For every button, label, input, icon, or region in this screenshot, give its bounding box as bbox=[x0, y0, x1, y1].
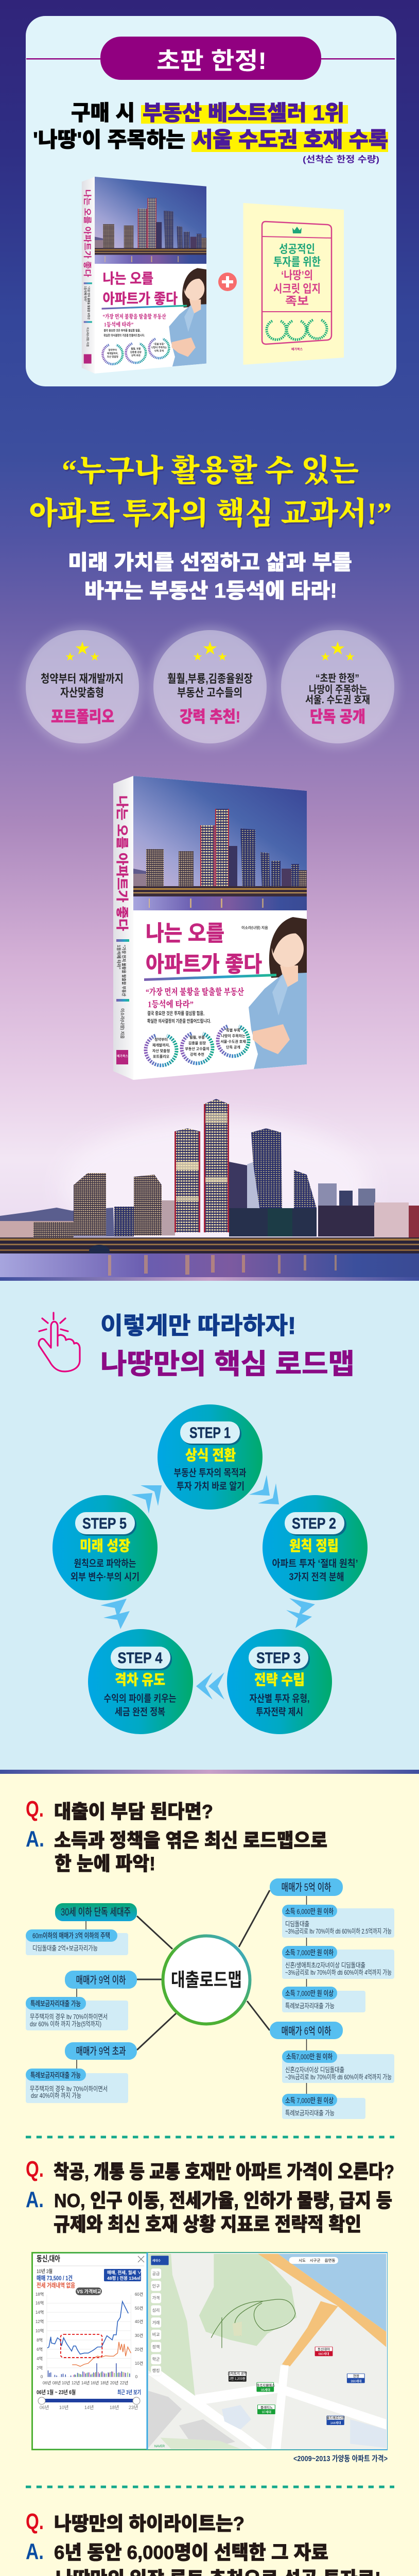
large book cover: 김종율 원장 bbox=[188, 1041, 206, 1045]
bonus booklet: 투자를 위한 bbox=[273, 256, 321, 268]
line chart: apartment price: 0 bbox=[135, 2375, 138, 2379]
map: neighborhood: 시구군 bbox=[310, 2258, 320, 2263]
node: up to 600M: 소득 7,000만 원 이상 bbox=[285, 2096, 334, 2105]
node: up to 500M: 특례보금자리대출 가능 bbox=[285, 2002, 335, 2010]
headline: core textbook: “누구나 활용할 수 있는 bbox=[63, 455, 360, 489]
large book cover: 훨훨, 부룡 bbox=[189, 1035, 205, 1040]
line chart: apartment price: 4억 bbox=[37, 2356, 43, 2361]
step 1: 부동산 투자의 목적과 bbox=[174, 1467, 246, 1479]
large book cover bbox=[113, 776, 307, 1080]
node: up to 600M: 소득7,000만 원 이하 bbox=[286, 2053, 333, 2061]
small book cover bbox=[82, 177, 206, 374]
bonus booklet: 족보 bbox=[285, 295, 309, 308]
step 2 bbox=[263, 1495, 368, 1600]
question 2: 규제와 최신 호재 상황 지표로 전략적 확인 bbox=[54, 2214, 361, 2235]
feature circle 2: recommendations: 훨훨,부룡,김종율원장 bbox=[167, 672, 253, 685]
feature circle 2: recommendations: 강력 추천! bbox=[180, 708, 240, 726]
map: neighborhood: 심리 bbox=[152, 2308, 160, 2313]
panel: price chart and map bbox=[32, 2252, 387, 2450]
map: neighborhood: 660세대 bbox=[318, 2352, 329, 2356]
line chart: apartment price: 매매, 전세, 월세 ∨ bbox=[107, 2270, 142, 2275]
small book cover: 나땅이 주목하는 bbox=[151, 346, 167, 349]
divider band bbox=[0, 1277, 419, 1281]
step 2: 원칙 정립 bbox=[289, 1538, 339, 1554]
line chart: apartment price: 10건 bbox=[135, 2361, 143, 2366]
feature circle 1: portfolio: 자산맞춤형 bbox=[60, 686, 104, 699]
offer headline with highlights: 서울 수도권 호재 수록 bbox=[193, 128, 388, 151]
step 1 bbox=[158, 1404, 263, 1510]
large book cover: 부동산 고수들의 bbox=[185, 1046, 210, 1051]
large book cover: 단독 공개 bbox=[226, 1045, 240, 1049]
bonus booklet bbox=[243, 203, 344, 365]
node: over 900M: 매매가 9억 초과 bbox=[76, 2045, 126, 2057]
heading: roadmap: 나땅만의 핵심 로드맵 bbox=[100, 1349, 355, 1380]
bonus booklet: 베가북스 bbox=[291, 347, 303, 351]
large book cover: 이소라(나땅) 지음 bbox=[241, 925, 268, 930]
large book cover: 재개발까지, bbox=[152, 1043, 170, 1047]
question 1: A. bbox=[26, 1826, 44, 1852]
subheadline bbox=[68, 551, 352, 602]
line chart: apartment price: VS 가격비교 bbox=[77, 2289, 101, 2294]
line chart: apartment price: 10년 bbox=[62, 2380, 70, 2385]
large book cover: 강력 추천 bbox=[190, 1052, 204, 1057]
large book cover: 나는 오를 bbox=[146, 921, 224, 945]
small book cover: 강력 추천 bbox=[131, 353, 141, 357]
question 3: A. bbox=[26, 2539, 44, 2564]
step 2: STEP 2 bbox=[292, 1515, 336, 1532]
small book cover: 이소라(나땅) 지음 bbox=[86, 327, 90, 347]
map: neighborhood: 가치토지 공략 bbox=[228, 2371, 247, 2376]
line chart: apartment price: 12년 bbox=[72, 2380, 80, 2385]
large book cover: 나땅이 주목하는 bbox=[221, 1033, 246, 1038]
step 5: 미래 성장 bbox=[80, 1538, 130, 1554]
step 5: 원칙으로 파악하는 bbox=[74, 1558, 136, 1569]
node: over 900M: 무주택자의 경우 ltv 70%이하이면서 bbox=[30, 2085, 108, 2093]
small book cover: 아파트가 좋다 bbox=[102, 291, 178, 307]
small book cover: 결국 중요한 것은 투자를 결심할 힘을, bbox=[103, 328, 141, 332]
line chart: apartment price: 23년 bbox=[129, 2405, 138, 2410]
line chart: apartment price: 30건 bbox=[135, 2333, 143, 2338]
node: up to 500M: 신혼/생애최초/2자녀이상 디딤돌대출 bbox=[285, 1961, 365, 1969]
subheadline: 바꾸는 부동산 1등석에 타라! bbox=[84, 580, 337, 602]
question 1: 대출이 부담 된다면? bbox=[54, 1801, 213, 1822]
map: neighborhood: 95세대 bbox=[261, 2388, 270, 2392]
line chart: apartment price: 50건 bbox=[135, 2306, 143, 2311]
icon: plus bbox=[218, 273, 237, 291]
node: up to 600M: 매매가 6억 이하 bbox=[281, 2025, 331, 2037]
question 2: NO, 인구 이동, 전세가율, 인하가 물량, 급지 등 bbox=[54, 2190, 392, 2211]
map: neighborhood: 인구 bbox=[152, 2283, 160, 2289]
question 3 bbox=[26, 2509, 381, 2576]
step 4 bbox=[88, 1629, 193, 1734]
offer headline with highlights: '나땅'이 주목하는 bbox=[33, 128, 185, 151]
small book cover: 재개발까지, bbox=[107, 351, 118, 355]
line chart: apartment price: 18년 bbox=[100, 2380, 109, 2385]
step 3 bbox=[227, 1629, 332, 1734]
feature circle 1: portfolio bbox=[22, 626, 143, 748]
feature circle 3: exclusive: 단독 공개 bbox=[310, 708, 365, 726]
offer headline with highlights: 부동산 베스트셀러 1위 bbox=[143, 101, 344, 125]
line chart: apartment price: 전세 거래내역 없음 bbox=[37, 2281, 75, 2289]
step 5 bbox=[53, 1495, 158, 1600]
large book cover: 베가북스 bbox=[117, 1054, 129, 1058]
node: up to 500M bbox=[270, 1878, 394, 2012]
badge: first edition limited: 초판 한정! bbox=[156, 47, 267, 74]
line chart: apartment price: 20건 bbox=[135, 2347, 143, 2352]
line chart: apartment price: 48평 | 전용 134㎡ bbox=[107, 2276, 141, 2281]
small book cover: 1등석에 타라” bbox=[83, 286, 88, 302]
map: neighborhood: 랭킹 bbox=[152, 2368, 160, 2373]
feature circle 3: exclusive: 나땅이 주목하는 bbox=[309, 684, 367, 696]
step 4: 수익의 파이를 키우는 bbox=[104, 1693, 176, 1704]
line chart: apartment price: 10년 bbox=[59, 2405, 68, 2410]
node: up to 500M: 소득 7,000만 원 이하 bbox=[285, 1948, 334, 1957]
question 2: Q. bbox=[26, 2157, 44, 2182]
line chart: apartment price: 20년 bbox=[110, 2380, 118, 2385]
map: neighborhood: 가격 bbox=[152, 2295, 160, 2300]
map: neighborhood: NAVER bbox=[154, 2445, 165, 2448]
map: neighborhood: 월드메르디앙 bbox=[326, 2415, 345, 2420]
step 4: 격차 유도 bbox=[115, 1672, 165, 1688]
line chart: apartment price: 8억 bbox=[37, 2337, 43, 2343]
node: over 900M: 특례보금자리대출 가능 bbox=[30, 2071, 81, 2079]
small book cover: 나는 오를 아파트가 좋다 bbox=[83, 190, 92, 277]
offer headline with highlights: 구매 시 bbox=[71, 101, 135, 125]
divider band bbox=[0, 1770, 419, 1774]
line chart: apartment price: 06년 bbox=[40, 2405, 49, 2410]
small book cover: 김종율 원장 bbox=[130, 350, 142, 354]
headline: core textbook bbox=[29, 454, 393, 532]
feature circle 2: recommendations: 부동산 고수들의 bbox=[177, 686, 242, 699]
heading: roadmap: 이렇게만 따라하자! bbox=[100, 1312, 296, 1339]
question 3: 나땅만의 하이라이트는? bbox=[54, 2513, 245, 2534]
node: up to 600M: 신혼/2자녀이상 디딤돌대출 bbox=[285, 2066, 344, 2074]
feature circle 3: exclusive bbox=[277, 626, 398, 748]
line chart: apartment price: 22년 bbox=[120, 2380, 128, 2385]
large book cover: 이소라(나땅) 지음 bbox=[120, 1008, 125, 1039]
step 1: STEP 1 bbox=[189, 1425, 231, 1442]
large book cover: 서울·수도권 호재 bbox=[220, 1039, 246, 1044]
step 2: 아파트 투자 ‘절대 원칙’ bbox=[272, 1558, 358, 1569]
large book cover: 나는 오를 아파트가 좋다 bbox=[115, 795, 129, 931]
question 1: 소득과 정책을 엮은 최신 로드맵으로 bbox=[54, 1830, 327, 1851]
map: neighborhood: 비교 bbox=[152, 2332, 160, 2337]
question 2 bbox=[26, 2157, 394, 2235]
section background: roadmap bbox=[0, 1281, 419, 1770]
map: neighborhood: 시도 bbox=[299, 2258, 306, 2263]
step 3: 투자전략 제시 bbox=[256, 1706, 303, 1718]
line chart: apartment price: 6억 bbox=[37, 2347, 43, 2352]
line chart: apartment price: 12억 bbox=[36, 2319, 44, 2324]
small book cover: “가장 먼저 불황을 탈출할 부동산 bbox=[86, 286, 91, 319]
large book cover: 1등석에 타라” bbox=[148, 999, 194, 1009]
step 5: STEP 5 bbox=[82, 1515, 127, 1532]
offer headline with highlights bbox=[33, 101, 388, 164]
map: neighborhood: 학군 bbox=[152, 2357, 160, 2362]
line chart: apartment price: 매매 73,500 / 1건 bbox=[37, 2274, 73, 2282]
bonus booklet: 성공적인 bbox=[279, 243, 315, 256]
small book cover: 나는 오를 bbox=[102, 270, 153, 286]
map: neighborhood: 거래 bbox=[152, 2320, 160, 2325]
feature circle 1: portfolio: 포트폴리오 bbox=[51, 708, 114, 726]
node: age 30 and under: 30세 이하 단독 세대주 bbox=[61, 1906, 131, 1918]
mind map: loan roadmap bbox=[26, 1878, 394, 2119]
line chart: apartment price: 06년 bbox=[43, 2380, 51, 2385]
line chart: apartment price: 18억 bbox=[36, 2292, 44, 2297]
large book cover: “가장 먼저 불황을 탈출할 부동산 bbox=[146, 987, 244, 997]
large book cover: 자산 맞춤형 bbox=[152, 1048, 170, 1053]
node: up to 900M: 매매가 9억 이하 bbox=[76, 1974, 126, 1986]
small book cover: 훨훨, 부룡 bbox=[131, 347, 141, 350]
step 3: 자산별 투자 유형, bbox=[249, 1693, 310, 1704]
line chart: apartment price bbox=[34, 2255, 144, 2410]
heading: roadmap bbox=[100, 1312, 355, 1380]
large book cover: 청약부터 bbox=[154, 1037, 168, 1042]
line chart: apartment price: 40건 bbox=[135, 2319, 143, 2324]
line chart: apartment price: 60건 bbox=[135, 2292, 143, 2297]
line chart: apartment price: 14억 bbox=[36, 2310, 44, 2315]
subheadline: 미래 가치를 선점하고 삶과 부를 bbox=[68, 551, 352, 574]
map: neighborhood: 공급 bbox=[152, 2272, 160, 2276]
step 2: 3가지 전격 분해 bbox=[289, 1571, 344, 1583]
small book cover: 확실한 의사결정의 기준을 만들어드립니다. bbox=[103, 333, 145, 337]
node: up to 900M bbox=[26, 1971, 137, 2030]
step 3: 전략 수립 bbox=[254, 1672, 305, 1688]
feature circle 1: portfolio: 청약부터 재개발까지 bbox=[41, 672, 124, 685]
line chart: apartment price: 18년 bbox=[110, 2405, 119, 2410]
node: up to 500M: 소득 7,000만 원 이상 bbox=[285, 1989, 334, 1997]
headline: core textbook: 아파트 투자의 핵심 교과서!” bbox=[30, 498, 393, 532]
feature circle 3: exclusive: 서울. 수도권 호재 bbox=[305, 694, 370, 706]
line chart: apartment price: 14년 bbox=[81, 2380, 90, 2385]
node: over 900M bbox=[26, 2042, 137, 2103]
map: neighborhood: 플래티노 bbox=[260, 2405, 273, 2410]
map: neighborhood: 144세대 bbox=[330, 2421, 341, 2425]
node: age 30 and under bbox=[26, 1903, 137, 1955]
map: neighborhood: 세대수 bbox=[152, 2259, 161, 2263]
large book cover: 결국 중요한 것은 투자를 결심할 힘을, bbox=[147, 1010, 204, 1016]
small book cover: 청약부터 bbox=[109, 348, 117, 352]
line chart: apartment price: 최근 3년 보기 bbox=[117, 2388, 141, 2396]
map: neighborhood: 현장 bbox=[353, 2374, 359, 2378]
node: up to 900M: dsr 60% 이하 까지 가능(5억까지) bbox=[30, 2020, 101, 2028]
headline: core textbook: 아파트 투자의 핵심 교과서!” bbox=[29, 497, 392, 531]
question 3: 6년 동안 6,000명이 선택한 그 자료 bbox=[54, 2542, 328, 2563]
node: up to 500M: 소득 6,000만 원 이하 bbox=[285, 1907, 334, 1916]
node: age 30 and under: 디딤돌대출 2억+보금자리가능 bbox=[32, 1944, 98, 1952]
node: up to 600M bbox=[270, 2022, 394, 2119]
feature circle 2: recommendations bbox=[149, 626, 271, 748]
map: neighborhood: 2만 1,203원 bbox=[229, 2377, 246, 2381]
node: age 30 and under: 60m이하의 매매가 3억 이하의 주택 bbox=[32, 1931, 110, 1940]
step 1: 상식 전환 bbox=[185, 1447, 236, 1463]
step 4: STEP 4 bbox=[117, 1650, 163, 1667]
map: neighborhood: 동신대아 bbox=[318, 2347, 330, 2351]
line chart: apartment price: 2억 bbox=[37, 2365, 43, 2370]
small book cover: 1등석에 타라” bbox=[104, 321, 133, 328]
bonus booklet: 시크릿 입지 bbox=[273, 282, 321, 295]
map: neighborhood: 990세대 bbox=[351, 2379, 362, 2383]
large book cover: 확실한 의사결정의 기준을 만들어드립니다. bbox=[147, 1018, 211, 1024]
question 1 bbox=[26, 1797, 327, 1874]
step 3: STEP 3 bbox=[256, 1650, 301, 1667]
city skyline photo bbox=[0, 1099, 419, 1278]
line chart: apartment price: 08년 bbox=[53, 2380, 61, 2385]
small book cover: “가장 먼저 불황을 탈출할 부동산 bbox=[102, 313, 166, 320]
line chart: apartment price: 06년 1월 ~ 23년 6월 bbox=[37, 2388, 76, 2396]
question 1: 한 눈에 파악! bbox=[55, 1853, 155, 1874]
large book cover: “특별 부록” bbox=[224, 1028, 242, 1032]
large book cover: “가장 먼저 불황을 탈출할 부동산 bbox=[121, 945, 127, 997]
line chart: apartment price: 14년 bbox=[84, 2405, 94, 2410]
feature circle 3: exclusive: “초판 한정” bbox=[316, 672, 359, 684]
map caption: <2009~2013 가양동 아파트 가격> bbox=[293, 2454, 388, 2463]
center node bbox=[163, 1936, 250, 2024]
map: neighborhood: 정책 bbox=[152, 2344, 160, 2349]
map: neighborhood: 97세대 bbox=[262, 2410, 271, 2414]
large book cover: 포트폴리오 bbox=[153, 1054, 170, 1059]
line chart: apartment price: 16억 bbox=[36, 2300, 44, 2306]
bonus booklet: ‘나땅’의 bbox=[281, 269, 313, 282]
node: over 900M: dsr 40%이하 까지 가능 bbox=[31, 2092, 81, 2099]
headline: core textbook: “누구나 활용할 수 있는 bbox=[62, 454, 359, 488]
large book cover: 1등석에 타라” bbox=[116, 945, 121, 969]
node: up to 500M: 매매가 5억 이하 bbox=[281, 1882, 331, 1893]
line chart: apartment price: 10년 3월 bbox=[37, 2268, 53, 2275]
map: neighborhood: 마곡지웰에스 bbox=[256, 2383, 275, 2387]
badge: first edition limited bbox=[100, 37, 321, 80]
large book cover: 아파트가 좋다 bbox=[146, 952, 262, 976]
question 3: Q. bbox=[26, 2509, 44, 2534]
step 5: 외부 변수·부의 시기 bbox=[71, 1571, 139, 1583]
map: neighborhood: 읍면동 bbox=[325, 2258, 335, 2263]
line chart: apartment price: 10억 bbox=[36, 2328, 44, 2333]
line chart: apartment price: 0 bbox=[41, 2375, 43, 2379]
question 2: A. bbox=[26, 2187, 44, 2212]
node: up to 500M: 디딤돌대출 bbox=[285, 1920, 309, 1928]
line chart: apartment price: 동신,대아 bbox=[37, 2255, 60, 2263]
step 1: 투자 가치 바로 알기 bbox=[177, 1481, 245, 1492]
small book cover: 자산 맞춤형 bbox=[107, 355, 118, 359]
node: up to 900M: 특례보금자리대출 가능 bbox=[30, 1999, 81, 2008]
panel: first edition limited offer bbox=[26, 16, 396, 386]
center node: 대출로드맵 bbox=[171, 1969, 242, 1990]
node: up to 600M: 특례보금자리대출 가능 bbox=[285, 2109, 335, 2117]
node: up to 900M: 무주택자의 경우 ltv 70%이하이면서 bbox=[30, 2013, 108, 2021]
arrows between steps bbox=[100, 1475, 315, 1700]
section background: Q and A bbox=[0, 1774, 419, 2576]
small book cover: 단독 공개 bbox=[154, 349, 164, 352]
step 4: 세금 완전 정복 bbox=[115, 1706, 165, 1718]
map: neighborhood bbox=[148, 2253, 387, 2449]
icon: pointing hand bbox=[39, 1313, 80, 1371]
line chart: apartment price: 16년 bbox=[91, 2380, 99, 2385]
offer headline with highlights: (선착순 한정 수량) bbox=[303, 155, 379, 164]
small book cover: “특별 부록” bbox=[153, 342, 165, 346]
question 1: Q. bbox=[26, 1797, 44, 1822]
section background: hero gradient bbox=[0, 0, 419, 1278]
